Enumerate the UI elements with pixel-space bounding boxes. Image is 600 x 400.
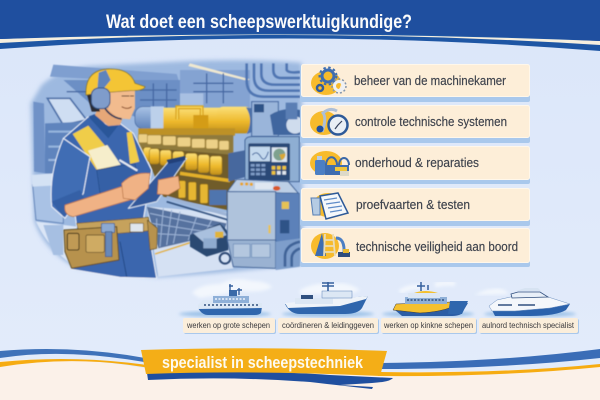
icon: ladder and tools (315, 233, 350, 257)
task list (300, 64, 530, 267)
machine room background (31, 60, 303, 277)
engineer (51, 69, 187, 278)
label: coördineren & leidinggeven (282, 321, 374, 330)
hair (87, 93, 100, 112)
right machinery (252, 102, 304, 137)
pipes (247, 63, 300, 97)
title: Wat doet een scheepswerktuigkundige? (106, 11, 412, 33)
diesel engine (135, 106, 256, 220)
icon: gears (317, 68, 346, 93)
task 2: control technical systems (300, 106, 530, 143)
task 3: maintenance and repairs (300, 146, 530, 184)
legs (72, 230, 157, 278)
small equipment on floor (190, 223, 230, 264)
hi-vis vest (73, 126, 121, 170)
task 3: maintenance and repairs: onderhoud & reparaties (355, 156, 479, 170)
ear protector (91, 88, 110, 109)
neck and face (95, 103, 123, 126)
bottom wave (0, 349, 600, 400)
task 1: machine room management: beheer van de machinekamer (354, 74, 506, 88)
hard hat (86, 69, 145, 95)
ship: large vessel (179, 279, 276, 334)
torso (63, 117, 152, 227)
task 5: technical safety on board: technische veiligheid aan boord (356, 240, 518, 254)
task 4: sea trials and testing: proefvaarten & testen (356, 198, 470, 212)
header banner (0, 0, 600, 51)
tool belt (77, 217, 151, 237)
illustration: engineer in machine room (31, 60, 304, 278)
clipboard (128, 158, 187, 208)
sleeve (51, 138, 90, 218)
slogan banner (141, 348, 393, 389)
ship: motor yacht (475, 288, 579, 334)
task 4: sea trials and testing (300, 188, 530, 226)
ship row (179, 279, 579, 334)
task 5: technical safety on board (300, 228, 530, 267)
ship: small yellow vessel (381, 282, 477, 334)
hands (122, 173, 150, 200)
icon: gauge and flask (316, 109, 348, 134)
slogan: specialist in scheepstechniek (162, 353, 363, 372)
icon: toolbox (315, 156, 349, 176)
task 2: control technical systems: controle technische systemen (355, 115, 507, 129)
ship: research vessel (278, 282, 379, 334)
task 1: machine room management (300, 64, 530, 102)
forearm (65, 186, 135, 217)
icon: checklist (311, 193, 348, 219)
label: werken op grote schepen (186, 321, 270, 330)
label: werken op kinkne schepen (383, 321, 473, 330)
control console (227, 137, 300, 270)
label: aulnord technisch specialist (482, 321, 575, 330)
